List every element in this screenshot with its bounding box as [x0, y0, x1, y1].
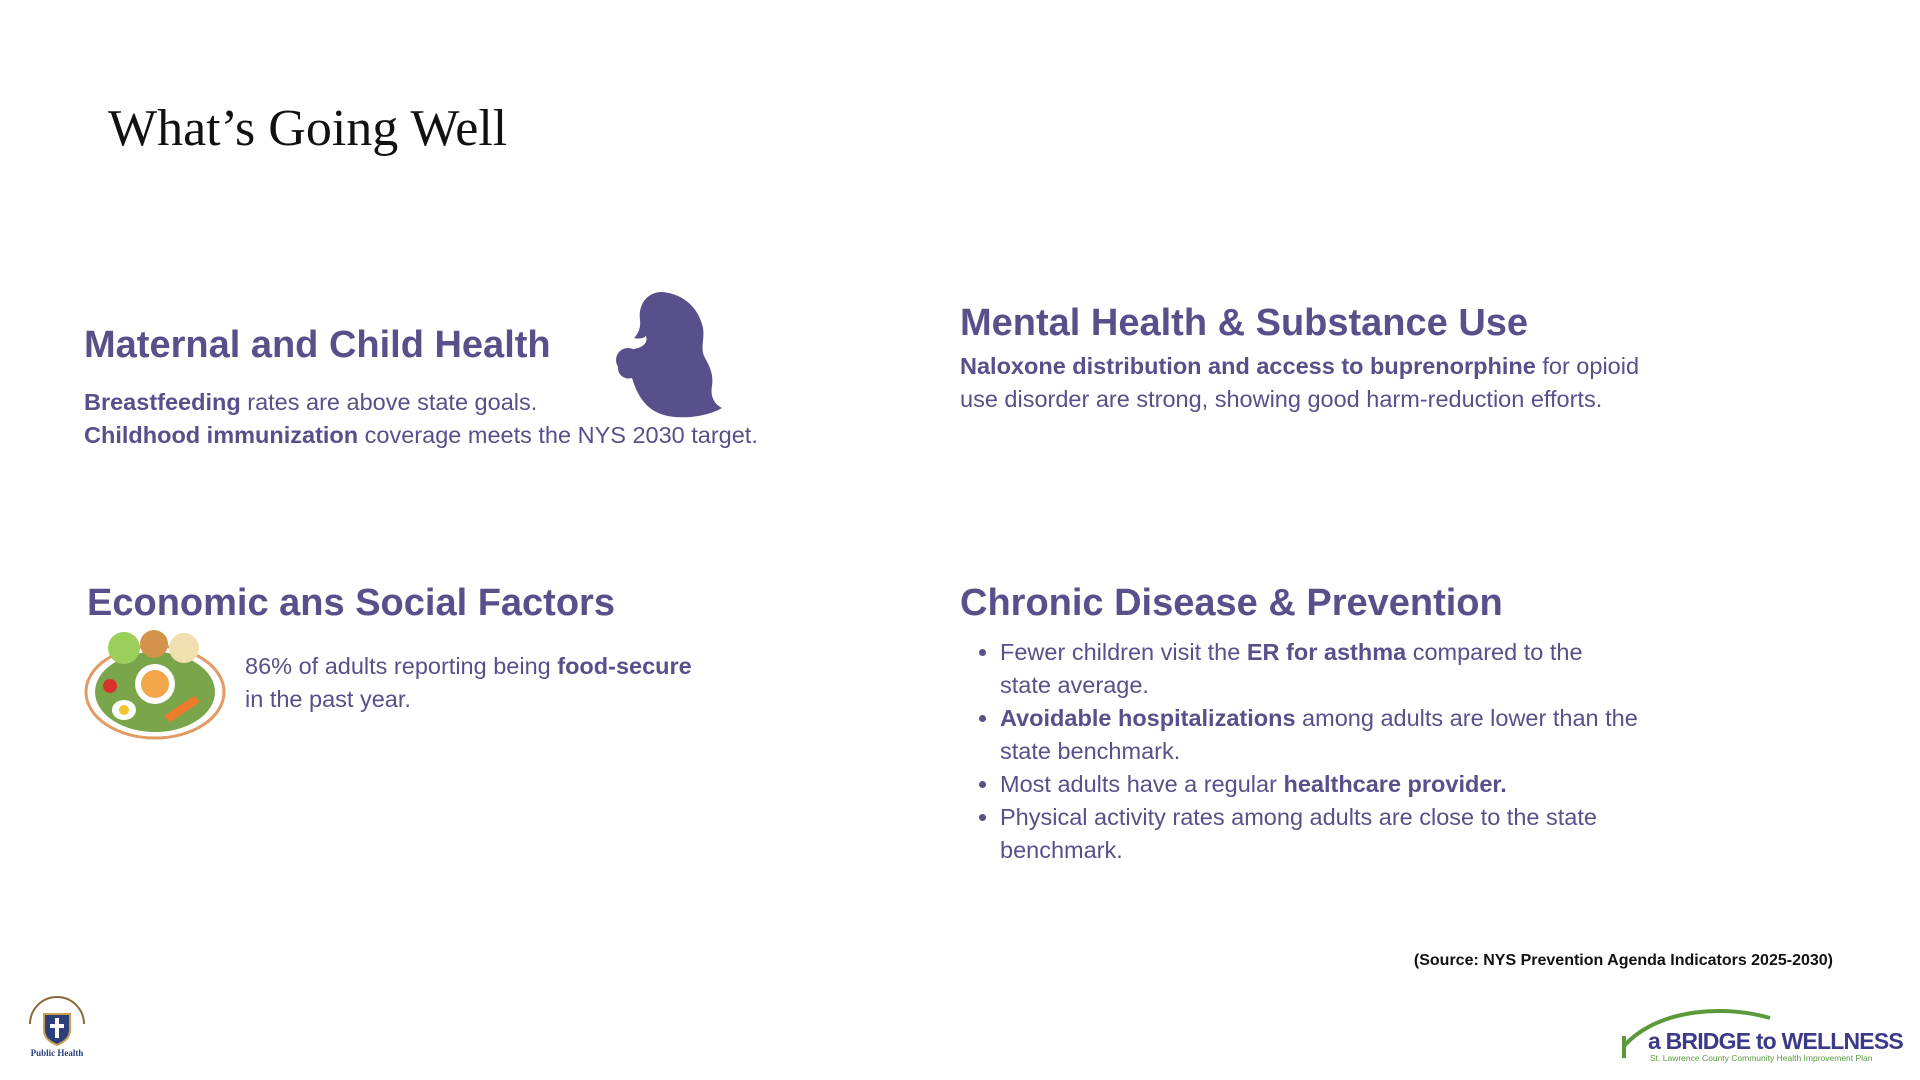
- text: food secure: [245, 653, 692, 712]
- list: chronic bullets: Avoidable hospitalizations among adults are lower than the: [1000, 705, 1638, 731]
- logo: bridge to wellness: a BRIDGE to WELLNESS: [1648, 1028, 1903, 1054]
- list: chronic bullets: Most adults have a regular healthcare provider.: [1000, 771, 1507, 797]
- panel: mental health: [960, 302, 1639, 412]
- list: chronic bullets: Physical activity rates among adults are close to the state: [1000, 804, 1597, 830]
- logo: public health: [29, 996, 85, 1058]
- panel: economic: [84, 582, 692, 740]
- text: maternal details: Childhood immunization coverage meets the NYS 2030 target.: [84, 422, 758, 448]
- list: chronic bullets: benchmark.: [1000, 837, 1123, 863]
- text: food secure: in the past year.: [245, 686, 411, 712]
- logo: public health: Public Health: [31, 1048, 83, 1058]
- list: chronic bullets: state benchmark.: [1000, 738, 1180, 764]
- logo: bridge to wellness: St. Lawrence County Community Health Improvement Plan: [1650, 1053, 1873, 1063]
- text: mental health details: use disorder are strong, showing good harm-reduction efforts.: [960, 386, 1602, 412]
- list: chronic bullets: Fewer children visit the ER for asthma compared to the: [1000, 639, 1583, 665]
- panel: maternal and child health: [84, 292, 758, 448]
- text: maternal details: Breastfeeding rates are above state goals.: [84, 389, 537, 415]
- panel: chronic disease: [960, 582, 1638, 863]
- icon: mother and child: [616, 292, 722, 418]
- icon: food plate: [84, 630, 226, 740]
- text: food secure: 86% of adults reporting being food-secure: [245, 653, 692, 679]
- list: chronic bullets: state average.: [1000, 672, 1149, 698]
- list: chronic bullets: [979, 639, 1638, 863]
- text: mental health details: [960, 353, 1639, 412]
- heading: chronic: Chronic Disease & Prevention: [960, 582, 1503, 624]
- text: maternal details: [84, 389, 758, 448]
- heading: economic: Economic ans Social Factors: [87, 582, 615, 624]
- heading: maternal: Maternal and Child Health: [84, 324, 551, 366]
- text: mental health details: Naloxone distribution and access to buprenorphine for opioid: [960, 353, 1639, 379]
- heading: mental health: Mental Health & Substance Use: [960, 302, 1528, 344]
- source note: (Source: NYS Prevention Agenda Indicators 2025-2030): [1414, 952, 1833, 969]
- logo: bridge to wellness: [1622, 1009, 1903, 1063]
- title: What’s Going Well: [108, 100, 507, 157]
